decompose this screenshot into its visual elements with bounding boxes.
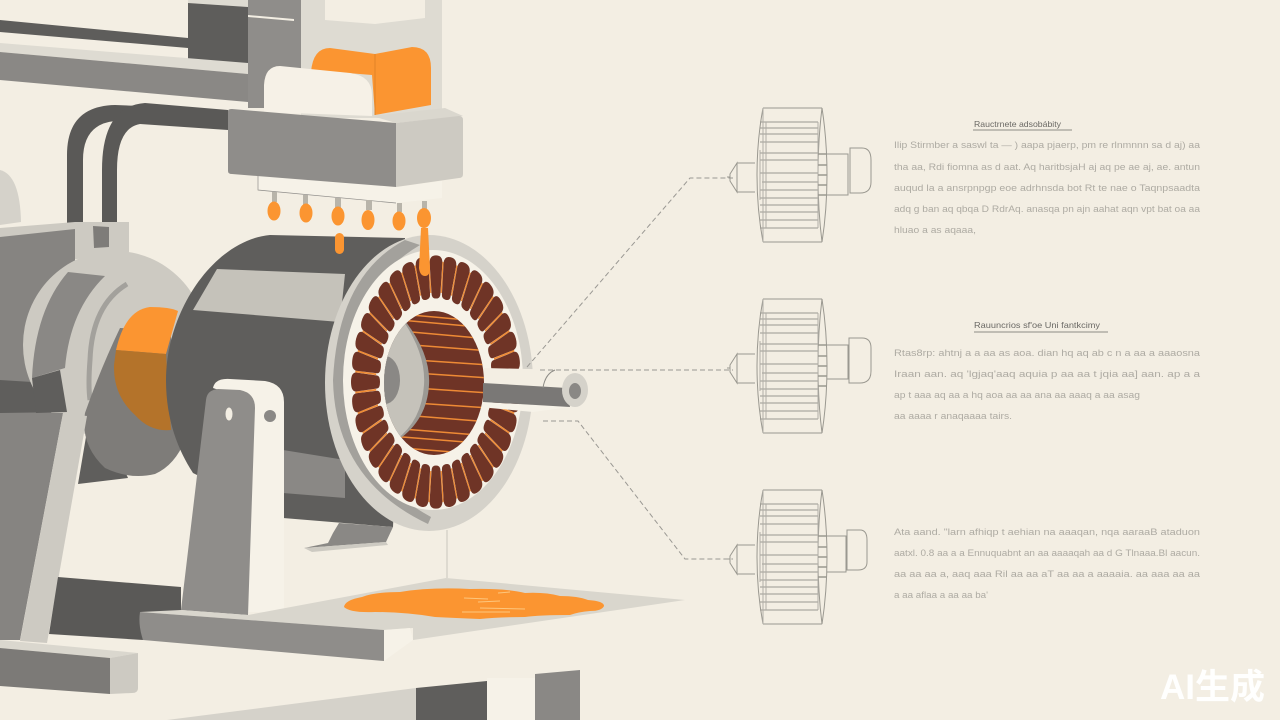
hoses — [67, 103, 228, 226]
lower left block — [0, 640, 138, 694]
section 3 body text: Ata aand. "larn afhiqp t aehian na aaaqan, nqa aaraaB ataduon — [894, 527, 1200, 537]
section 2 body text: aa aaaa r anaqaaaa tairs. — [894, 411, 1012, 421]
fan icon top — [727, 108, 871, 242]
upper machine frame — [0, 0, 442, 118]
platform — [139, 530, 685, 661]
fan icon middle — [727, 299, 871, 433]
watermark: AI生成 — [1160, 668, 1265, 707]
left leg — [0, 413, 87, 643]
section 3 body text: aa aa aa a, aaq aaa Ril aa aa aT aa aa a aaaaia. aa aaa aa aa — [894, 569, 1200, 579]
orange resin reservoir — [311, 47, 431, 115]
section 1 body text: auqud la a ansrpnpgp eoe adrhnsda bot Rt te nae o Taqnpsaadta — [894, 183, 1200, 193]
dispensing head — [228, 108, 463, 203]
section 2 heading: Rauuncrios sf'oe Uni fantkcimy — [974, 320, 1101, 330]
dashed leader lines — [527, 178, 733, 559]
section 1 body text: Ilip Stirmber a saswl ta — ) aapa pjaerp, pm re rlnmnnn sa d aj) aa — [894, 140, 1200, 150]
section 1 body text — [894, 140, 1200, 235]
section 2 body text: Iraan aan. aq 'lgjaq'aaq aquia p aa aa t jqia aa] aan. ap a a — [894, 369, 1200, 379]
fan icon bottom — [727, 490, 867, 624]
orange bearing window — [114, 307, 178, 430]
section 1 body text: tha aa, Rdi fiomna as d aat. Aq haritbsjaH aj aq pe ae aj, ae. antun — [894, 162, 1200, 172]
section 2 body text: Rtas8rp: ahtnj a a aa as aoa. dian hq aq ab c n a aa a aaaosna — [894, 348, 1200, 358]
section 3 body text: aatxl. 0.8 aa a a Ennuquabnt an aa aaaaqah aa d G Tlnaaa.Bl aacun. — [894, 548, 1200, 558]
motor foot — [304, 523, 393, 552]
section 2 body text: ap t aaa aq aa a hq aoa aa aa ana aa aaaq a aa asag — [894, 390, 1140, 400]
white hopper block — [264, 66, 372, 116]
output shaft — [483, 368, 588, 412]
section 1 body text: hluao a as aqaaa, — [894, 225, 976, 235]
motor drum — [166, 235, 405, 527]
left motor housing — [0, 170, 207, 484]
dark crossbar — [49, 577, 181, 640]
section 1 heading: Rauctrnete adsobábity — [974, 119, 1062, 129]
section 1 body text: adq g ban aq qbqa D RdrAq. anasqa pn ajn aahat aqn vpt bat oa aa — [894, 204, 1200, 214]
stator coils — [351, 255, 521, 509]
stator bore with inner windings — [384, 311, 484, 455]
section 3 body text — [894, 527, 1200, 600]
stator outer ring — [325, 235, 533, 531]
resin puddle — [344, 588, 604, 619]
resin drips — [268, 192, 431, 276]
section 2 body text — [894, 348, 1200, 421]
bracket — [181, 379, 284, 615]
table base — [167, 670, 580, 720]
section 3 body text: a aa aflaa a aa aa ba' — [894, 590, 988, 600]
